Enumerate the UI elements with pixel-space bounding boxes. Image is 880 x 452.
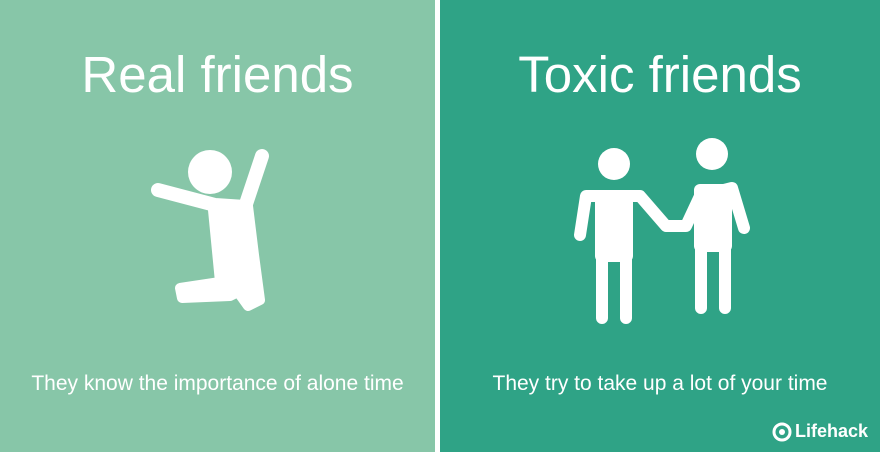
panel: toxic friends — [440, 0, 880, 452]
caption: They try to take up a lot of your time — [492, 372, 828, 395]
icon: jumping person — [151, 149, 269, 311]
panel: real friends — [0, 0, 435, 452]
heading: real friends: Real friends — [81, 46, 354, 103]
heading: toxic friends: Toxic friends — [518, 46, 802, 103]
icon: two people shaking hands — [574, 138, 750, 324]
logo: Lifehack: Lifehack — [795, 421, 868, 441]
caption: They know the importance of alone time — [31, 372, 404, 395]
